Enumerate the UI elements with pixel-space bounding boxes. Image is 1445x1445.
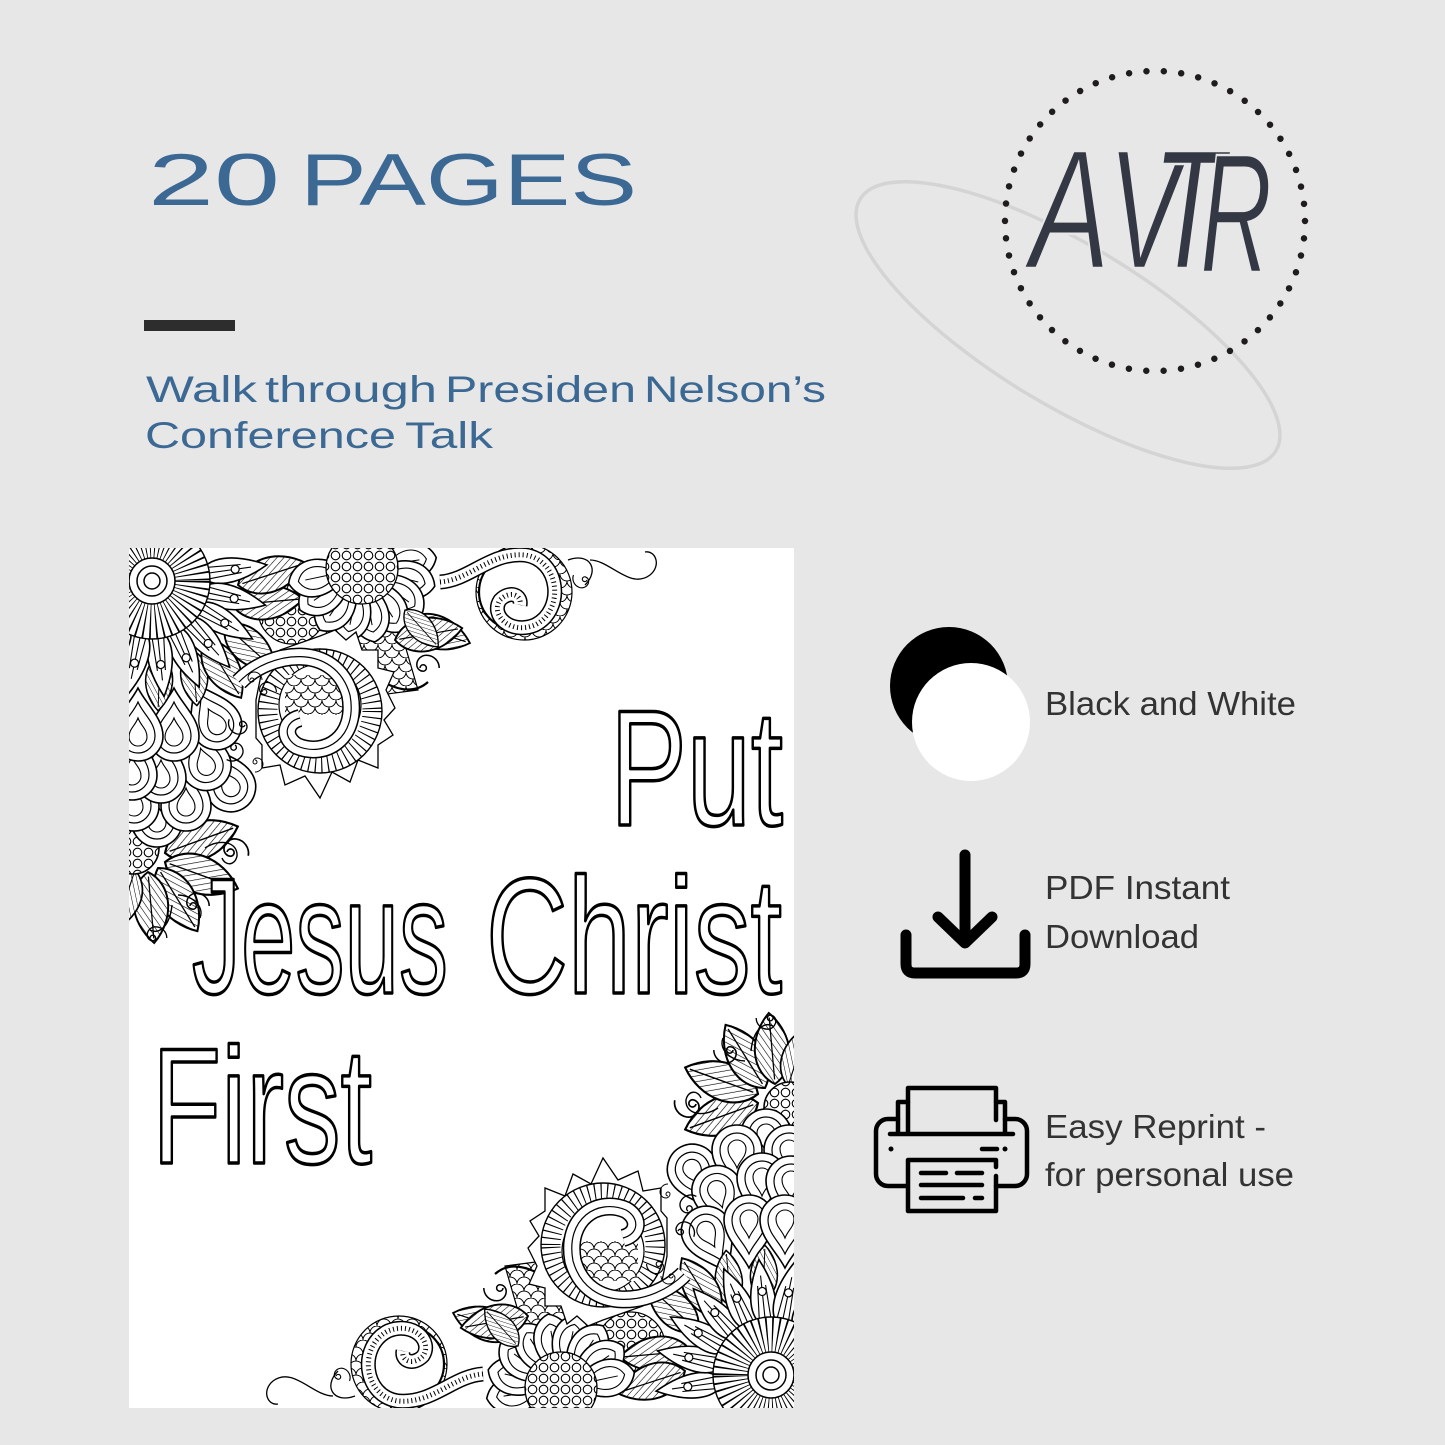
label: easy reprint for personal use: Easy Reprint - [1045,1108,1266,1145]
infographic canvas [129,68,1308,1408]
subtitle: Conference [145,415,396,456]
feature: pdf download [906,855,1230,973]
title: PAGES [300,140,637,221]
floral corners [83,523,840,1433]
icon: overlapping circles [890,627,1030,781]
label: pdf instant download: PDF Instant [1045,869,1230,906]
subtitle: Nelson’s [644,369,826,410]
page lettering: First [152,1014,372,1198]
logo lettering: V [1108,115,1191,305]
page lettering: Christ [486,844,782,1028]
feature: easy reprint [876,1088,1294,1211]
label: black and white: Black and White [1045,685,1296,722]
subtitle: through [265,369,437,410]
subtitle: Presiden [445,369,636,410]
label: pdf instant download: Download [1045,918,1199,955]
logo lettering: A [1024,115,1110,305]
logo: AVTR [819,71,1317,519]
title [148,140,637,221]
logo ellipse [819,131,1317,519]
logo lettering: T [1152,115,1231,305]
page lettering: Put [610,676,783,860]
logo lettering [1024,115,1272,309]
title: 20 [148,140,280,221]
icon: printer [876,1088,1027,1211]
label: pdf instant download [1045,869,1230,955]
logo dotted ring [1005,71,1305,371]
page lettering: Jesus [192,844,448,1028]
logo lettering: R [1200,119,1272,309]
divider bar [144,320,235,331]
subtitle [145,369,826,456]
subtitle: Walk [146,369,258,410]
feature: black and white [890,627,1296,781]
page lettering [152,676,783,1198]
subtitle: Talk [405,415,494,456]
label: easy reprint for personal use [1045,1108,1294,1193]
page sheet [129,548,794,1408]
icon: download [906,855,1025,973]
label: easy reprint for personal use: for personal use [1045,1156,1294,1193]
coloring page preview [129,548,794,1408]
